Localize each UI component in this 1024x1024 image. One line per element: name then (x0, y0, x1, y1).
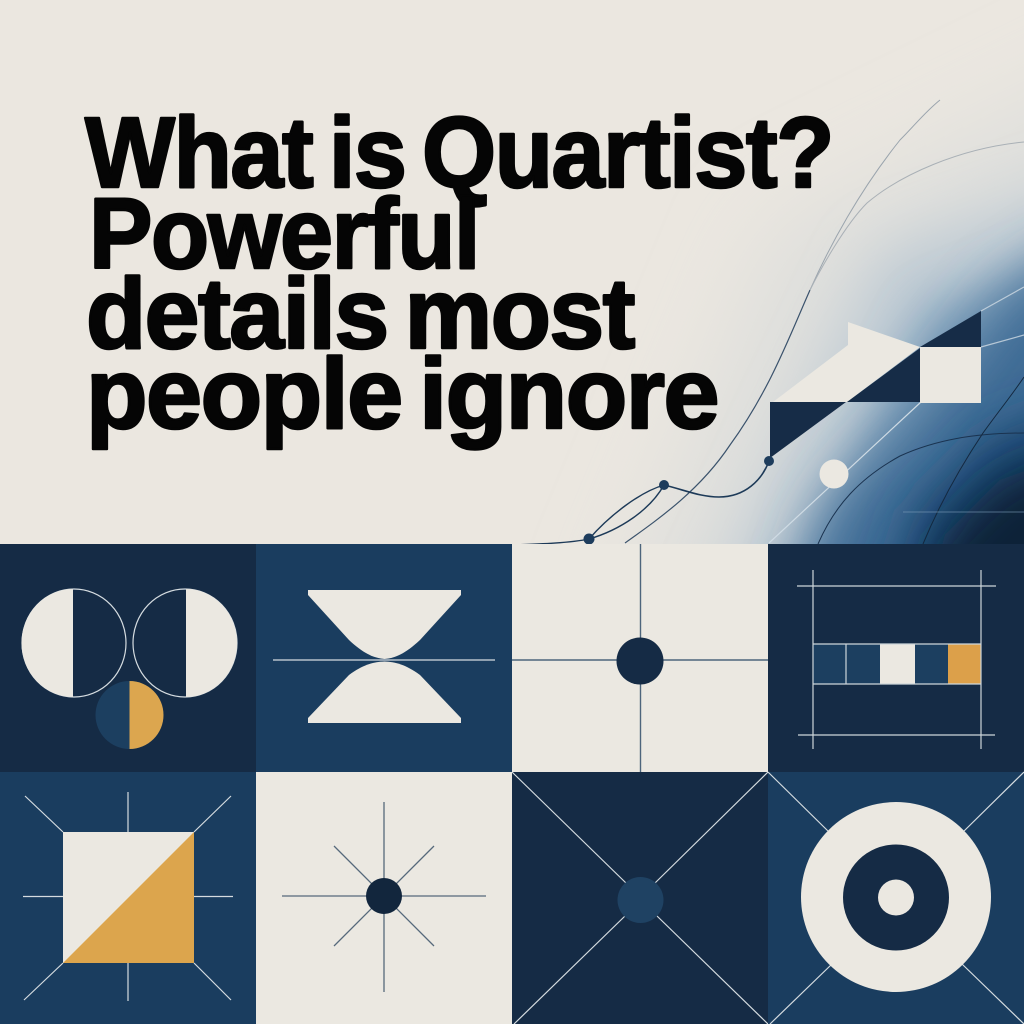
background gradient: blue corner glow (660, 122, 1024, 544)
panel: diagonal cross (512, 772, 768, 1024)
title: people ignore (86, 338, 718, 450)
panel: target rings (768, 772, 1024, 1024)
title (85, 97, 833, 450)
title: Powerful (89, 178, 479, 290)
background: header area (0, 0, 1024, 544)
panel: square with rays (0, 772, 256, 1024)
title: details most (86, 258, 635, 370)
panel: starburst (256, 772, 512, 1024)
panel: hourglass (256, 544, 512, 772)
panel: grid band (768, 544, 1024, 772)
panel: split circles (0, 544, 256, 772)
nodes (584, 456, 848, 544)
graphic: kite arrow shape (770, 311, 981, 458)
line network: curves and nodes (512, 100, 1024, 545)
panel: crosshair circle (512, 544, 768, 772)
title: What is Quartist? (85, 97, 833, 209)
